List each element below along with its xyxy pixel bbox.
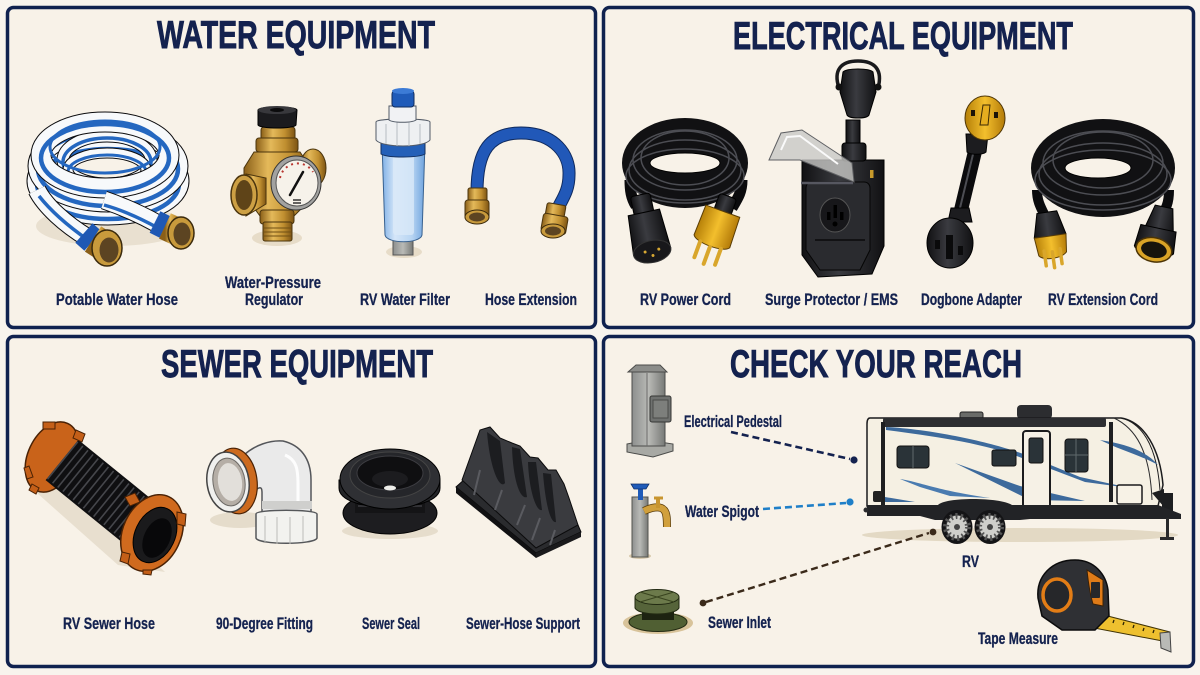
label: potable water hose: Potable Water Hose <box>56 290 178 309</box>
icon: 90-degree fitting <box>203 441 317 544</box>
arrow: water connection line <box>763 498 854 509</box>
icon: electrical pedestal <box>627 365 673 457</box>
icon: surge protector / EMS <box>769 61 884 277</box>
label: RV: RV <box>962 552 979 571</box>
icon: hose extension <box>465 133 569 238</box>
icon: potable water hose <box>36 121 194 266</box>
label: surge protector / EMS: Surge Protector / EMS <box>765 290 898 309</box>
icon: water spigot <box>629 484 667 559</box>
label: tape measure: Tape Measure <box>978 629 1058 648</box>
icon: tape measure <box>1038 560 1171 652</box>
icon: dogbone adapter <box>927 96 1005 268</box>
label: sewer seal: Sewer Seal <box>362 614 420 633</box>
label: RV sewer hose: RV Sewer Hose <box>63 614 155 633</box>
icon: RV power cord <box>622 118 748 270</box>
label: water-pressure regulator: Regulator <box>245 290 303 309</box>
label: 90-degree fitting: 90-Degree Fitting <box>216 614 313 633</box>
arrow: electrical connection line <box>731 432 858 464</box>
label: electrical pedestal: Electrical Pedestal <box>684 412 782 431</box>
arrow: sewer connection line <box>700 529 936 606</box>
heading: check your reach: CHECK YOUR REACH <box>730 343 1022 386</box>
label: water-pressure regulator <box>225 273 321 309</box>
label: water-pressure regulator: Water-Pressure <box>225 273 321 292</box>
label: RV water filter: RV Water Filter <box>360 290 450 309</box>
icon: sewer seal <box>339 449 440 539</box>
panel: water equipment <box>8 8 596 328</box>
label: RV extension cord: RV Extension Cord <box>1048 290 1158 309</box>
label: dogbone adapter: Dogbone Adapter <box>921 290 1022 309</box>
panel: check your reach <box>604 336 1194 666</box>
icon: RV water filter <box>376 88 430 258</box>
heading: water equipment: WATER EQUIPMENT <box>157 14 435 57</box>
icon: RV travel trailer <box>862 405 1181 544</box>
label: sewer-hose support: Sewer-Hose Support <box>466 614 580 633</box>
panel: electrical equipment <box>604 8 1194 328</box>
icon: water-pressure regulator <box>231 106 326 246</box>
label: RV power cord: RV Power Cord <box>640 290 731 309</box>
icon: sewer inlet <box>623 590 693 634</box>
heading: sewer equipment: SEWER EQUIPMENT <box>161 343 433 386</box>
icon: sewer-hose support <box>456 427 581 558</box>
icon: RV sewer hose <box>15 413 195 582</box>
label: sewer inlet: Sewer Inlet <box>708 613 771 632</box>
icon: RV extension cord <box>1031 119 1183 270</box>
panel: sewer equipment <box>8 336 596 666</box>
label: water spigot: Water Spigot <box>685 502 759 521</box>
label: hose extension: Hose Extension <box>485 290 577 309</box>
